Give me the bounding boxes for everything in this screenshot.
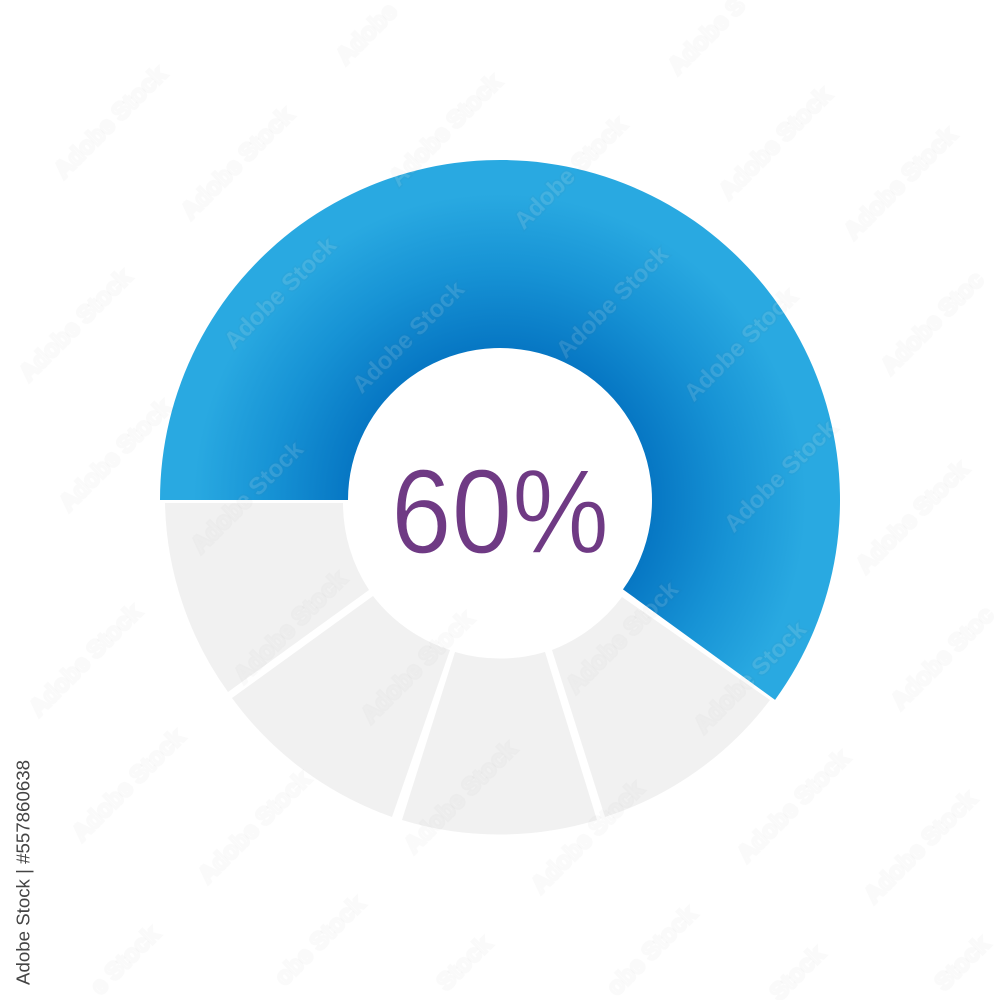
watermark pattern: obe Stock (270, 890, 370, 991)
watermark pattern: Adobe Stock (551, 240, 674, 364)
empty segment 2 (232, 596, 450, 817)
watermark pattern: e Stock (85, 920, 165, 1000)
watermark pattern: Adobe Stock (732, 744, 855, 868)
watermark pattern: Adobe Stock (229, 565, 352, 689)
watermark pattern: Adobe Stock (714, 81, 837, 205)
empty segment 1 (165, 503, 369, 692)
watermark pattern: Adobe Stock (176, 101, 299, 225)
watermark pattern: Adobe Stock (193, 765, 316, 889)
watermark pattern: Adobe Stock (509, 111, 632, 235)
center percentage label: 60% (391, 445, 609, 579)
watermark pattern: Adobe Stoc (886, 602, 999, 715)
watermark pattern: Adobe Stock (526, 775, 649, 899)
watermark pattern: Adobe Stock (347, 275, 470, 399)
watermark pattern: Adobe Stock (54, 393, 177, 517)
watermark pattern: Adobe Stock (561, 575, 684, 699)
filled segment: 60 percent (160, 160, 840, 700)
watermark pattern: Adobe Stock (186, 435, 309, 559)
watermark pattern: Adobe Stock (24, 598, 147, 722)
watermark pattern: Adobe Stock (851, 455, 974, 579)
watermark pattern: Adobe Stock (719, 414, 842, 538)
watermark pattern: Stock (432, 930, 497, 996)
watermark pattern: Adobe Stock (679, 283, 802, 407)
watermark pattern: Adobe (331, 0, 403, 70)
watermark pattern: Adobe Stock (689, 615, 812, 739)
donut chart (160, 160, 840, 835)
watermark pattern: Adobe Stock (839, 121, 962, 245)
watermark pattern: Adobe Stock (356, 605, 479, 729)
empty segment 3 (402, 652, 597, 835)
watermark pattern: Adobe Stoc (876, 267, 989, 380)
watermark pattern: Adobe Stock (219, 231, 342, 355)
watermark pattern: obe Stock (602, 900, 702, 1000)
watermark pattern: Stock (930, 930, 995, 996)
watermark pattern: Adobe Stock (14, 263, 137, 387)
watermark pattern: Adobe Stock (384, 68, 507, 192)
watermark pattern: Adobe Stock (67, 723, 190, 847)
watermark pattern: Adobe Stock (399, 735, 522, 859)
watermark pattern: Adobe Stock (49, 60, 172, 184)
watermark pattern: Adobe Stock (859, 785, 982, 909)
vertical stock id text: Adobe Stock | #557860638 (14, 760, 34, 985)
empty segment 4 (552, 597, 770, 817)
